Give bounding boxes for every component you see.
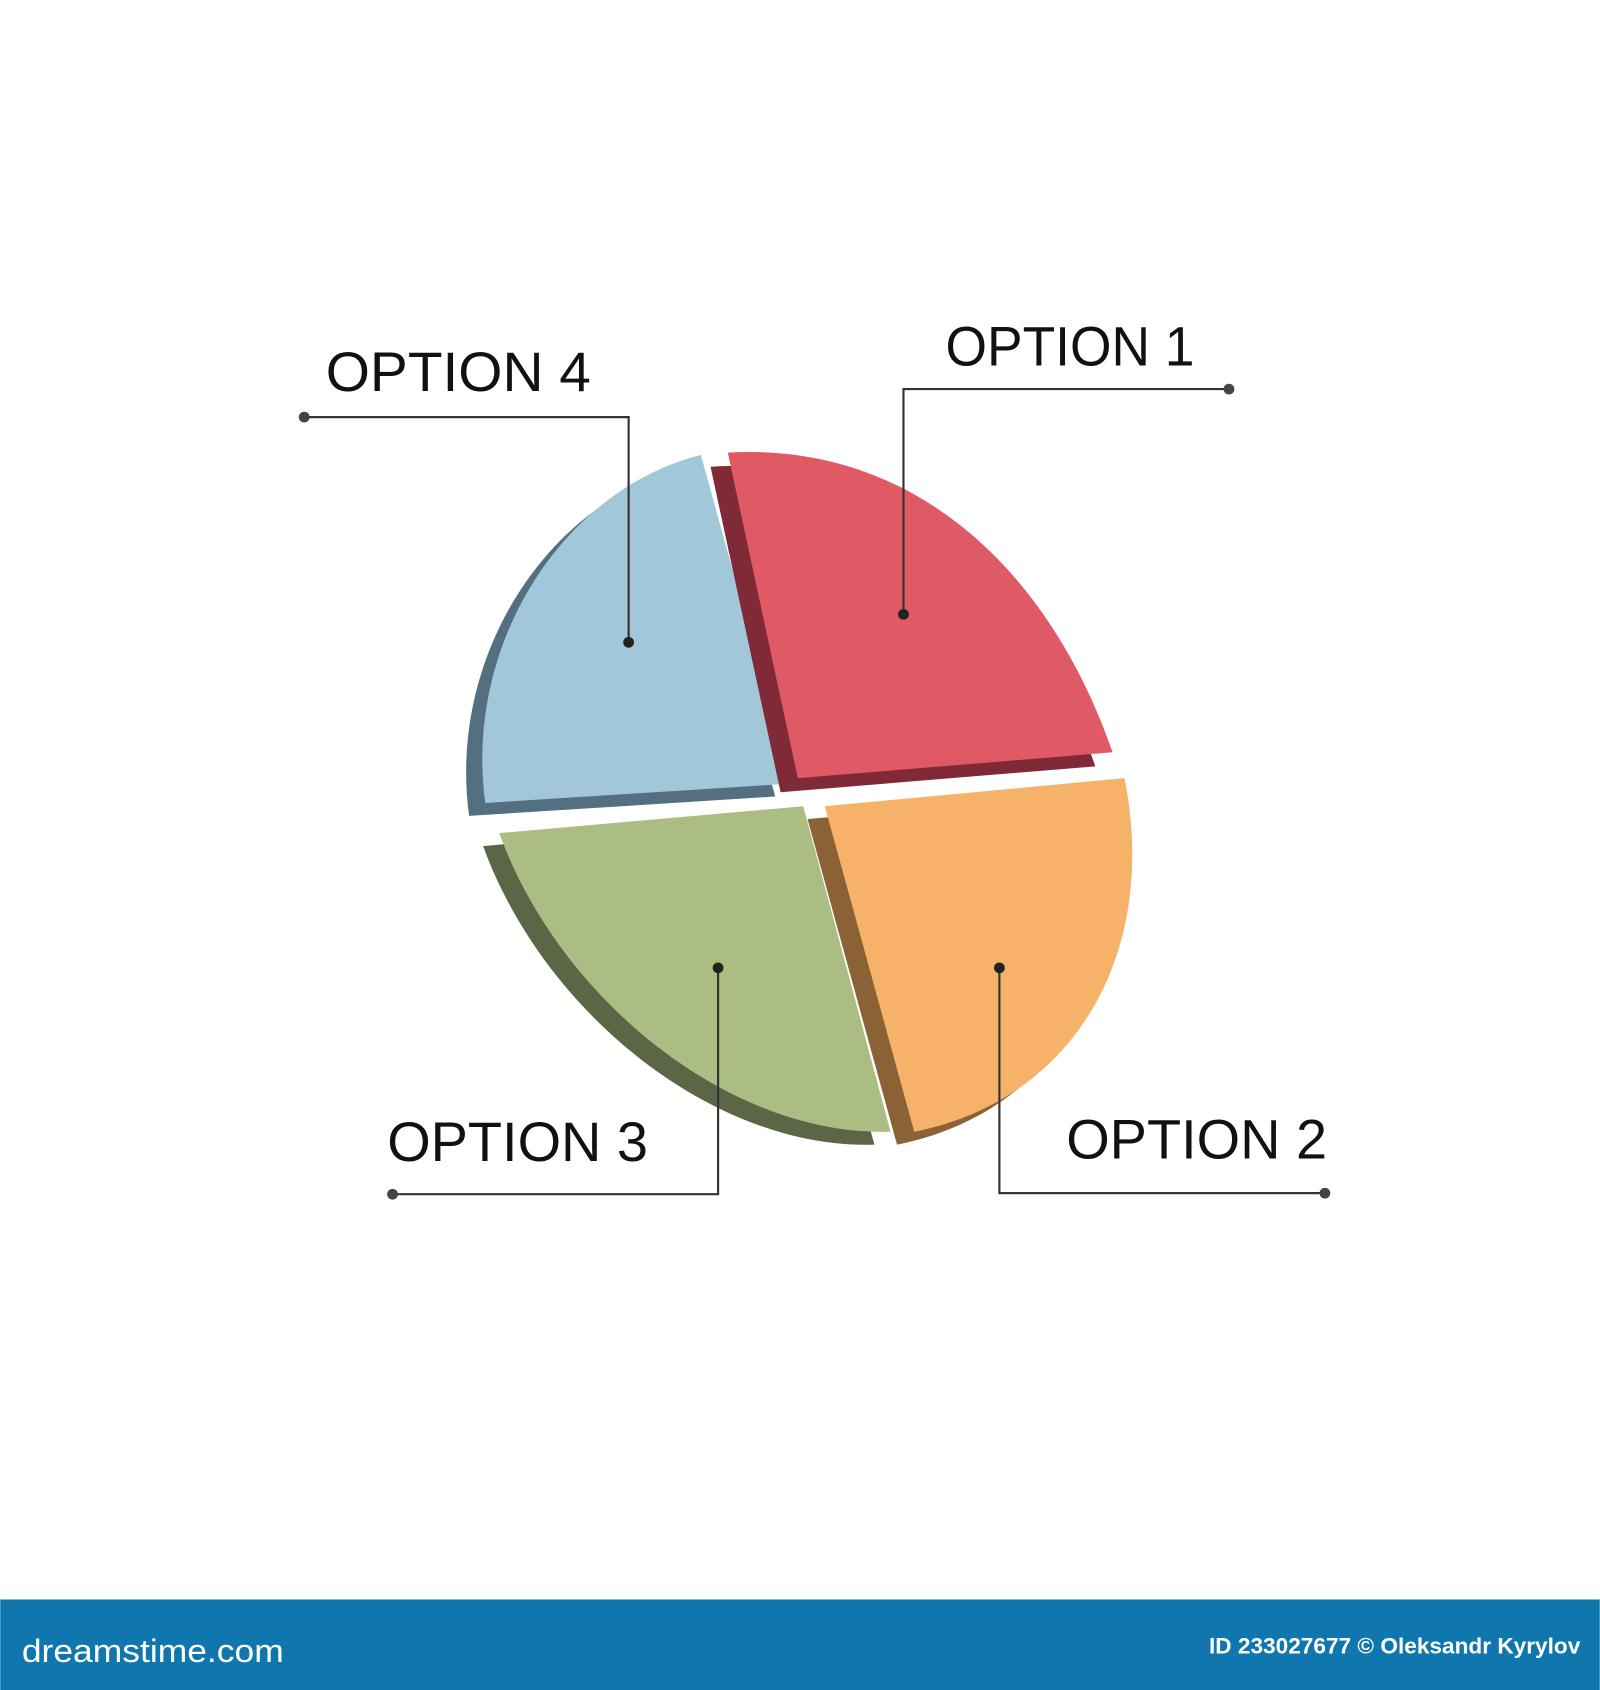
slice: option 4 blue (466, 455, 791, 816)
callout: option 1 (898, 314, 1234, 620)
footer bar: dreamstime.com (22, 1633, 284, 1669)
callout: option 2 (994, 962, 1330, 1199)
callout: option 4 (299, 340, 634, 648)
callout: option 3: OPTION 3 (387, 1110, 648, 1173)
slice: option 1 red (711, 452, 1113, 792)
callout: option 2: OPTION 2 (1066, 1108, 1327, 1171)
slice: option 3 green (483, 806, 891, 1145)
pie chart (466, 452, 1132, 1145)
callout: option 3 (387, 962, 723, 1200)
callout: option 4: OPTION 4 (326, 340, 591, 403)
footer bar: ID 233027677 © Oleksandr Kyrylov (1209, 1633, 1581, 1658)
callout: option 1: OPTION 1 (946, 314, 1194, 377)
slice: option 2 orange (808, 778, 1132, 1145)
footer bar (0, 1599, 1600, 1690)
